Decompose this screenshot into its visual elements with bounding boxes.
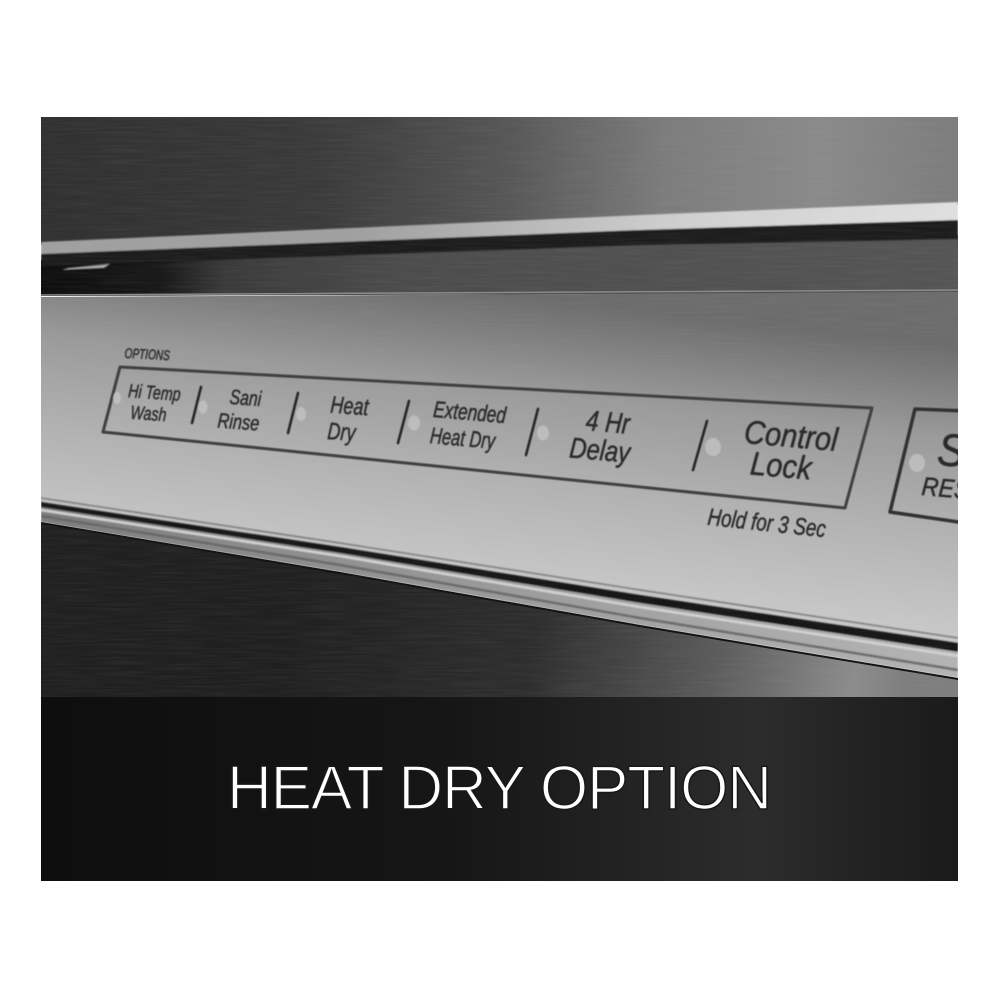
label: 4 hr delay: Delay xyxy=(568,431,633,469)
options button panel xyxy=(103,345,971,543)
dividers xyxy=(192,387,707,470)
label: extended heat dry: Extended xyxy=(432,398,508,429)
label: hi temp wash: Hi Temp xyxy=(127,380,181,405)
label: heat dry: Heat xyxy=(330,392,370,421)
start button outline xyxy=(890,409,965,523)
lower door surface xyxy=(41,523,958,697)
label: 4 hr delay xyxy=(568,410,632,469)
control panel surface xyxy=(41,292,958,647)
label: options: OPTIONS xyxy=(124,345,170,364)
label: start resume xyxy=(920,433,958,499)
label: heat dry xyxy=(327,392,370,447)
recess below handle xyxy=(41,235,958,296)
handle xyxy=(41,202,958,270)
label: start resume: RES xyxy=(920,473,971,505)
brushed metal texture xyxy=(41,117,958,697)
label: hold for 3 sec: Hold for 3 Sec xyxy=(706,504,827,543)
trim strip xyxy=(41,498,958,678)
label: control lock: Lock xyxy=(749,445,814,487)
label: sani rinse: Rinse xyxy=(217,409,260,435)
label: extended heat dry xyxy=(429,398,508,455)
label: sani rinse xyxy=(216,388,263,432)
upper door surface xyxy=(41,117,958,245)
photo: dishwasher control panel xyxy=(41,117,971,697)
recess highlight line xyxy=(41,290,958,295)
label: control lock: Control xyxy=(743,413,840,459)
caption band xyxy=(41,697,958,881)
label: 4 hr delay: 4 Hr xyxy=(585,404,632,441)
title: HEAT DRY OPTION xyxy=(227,754,772,823)
label: sani rinse: Sani xyxy=(229,385,263,411)
label: hi temp wash: Wash xyxy=(130,402,167,426)
label: start resume: S xyxy=(935,424,967,478)
label: control lock xyxy=(744,420,840,480)
label: heat dry: Dry xyxy=(327,419,358,447)
label: extended heat dry: Heat Dry xyxy=(429,424,498,455)
label: hi temp wash xyxy=(128,383,182,422)
indicator lights xyxy=(113,392,925,472)
options outline xyxy=(103,367,872,508)
